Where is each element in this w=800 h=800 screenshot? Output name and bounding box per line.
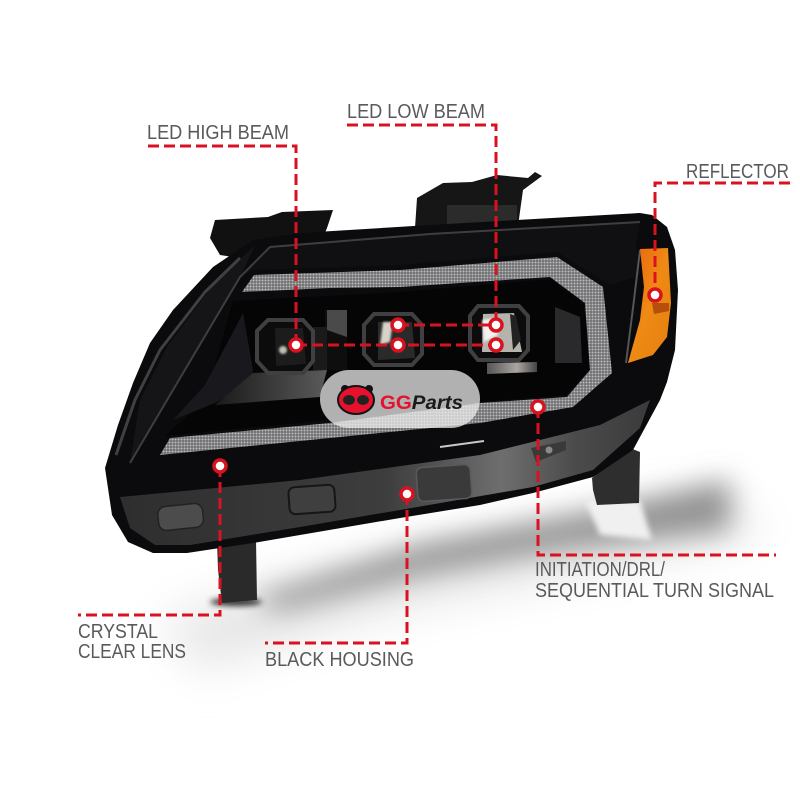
- leader: LED high beam: [148, 146, 296, 344]
- label: initiation / DRL / sequential turn signal: INITIATION/DRL/: [535, 559, 665, 581]
- amber reflector notch: [652, 303, 669, 314]
- chrome highlight: [440, 441, 484, 447]
- ground shadow: [160, 480, 770, 670]
- cavity right panel: [555, 307, 582, 363]
- projector right: [470, 306, 528, 360]
- logo badge: [320, 370, 480, 428]
- amber reflector: [628, 248, 671, 363]
- cavity lower grey panel: [215, 370, 327, 405]
- pillar highlight: [327, 310, 347, 337]
- leader: black housing: [265, 494, 407, 643]
- outer clear lens edge: [130, 222, 640, 463]
- housing silhouette: [105, 213, 678, 553]
- projector middle: [364, 314, 422, 365]
- side translucent lens area: [130, 245, 255, 463]
- lower lens reflector right: [416, 464, 472, 502]
- pin markers: [214, 289, 661, 500]
- top connector left: [210, 210, 333, 258]
- lower lens reflector middle: [288, 484, 336, 515]
- upper glossy area: [240, 222, 640, 285]
- leader: DRL: [538, 407, 776, 555]
- lower grey housing strip: [120, 400, 650, 545]
- label: LED low beam: LED LOW BEAM: [347, 101, 485, 123]
- leader: crystal clear lens: [78, 466, 220, 615]
- leader lines: [78, 125, 790, 643]
- cavity glare: [487, 362, 537, 374]
- badge pill: [320, 370, 480, 428]
- silver trim by reflector: [626, 250, 640, 363]
- label: initiation / DRL / sequential turn signal: SEQUENTIAL TURN SIGNAL: [535, 580, 774, 602]
- label: crystal clear lens: CLEAR LENS: [78, 641, 186, 663]
- lower lens reflector left: [157, 503, 204, 531]
- leader: reflector: [655, 183, 790, 295]
- cavity side wedge: [173, 313, 253, 420]
- side lens highlight: [116, 258, 240, 455]
- label: crystal clear lens: CRYSTAL: [78, 621, 158, 643]
- centre pillar: [325, 310, 347, 370]
- right foot bracket: [592, 448, 640, 505]
- top connector right: [415, 172, 542, 228]
- leader: high beam horizontal: [296, 344, 496, 346]
- inner projector cavity: [165, 279, 589, 436]
- headlight assembly: [105, 172, 678, 603]
- left foot bracket: [217, 540, 257, 603]
- lamp surround: [313, 327, 327, 370]
- leader: LED low beam: [347, 125, 496, 325]
- label: black housing: BLACK HOUSING: [265, 649, 414, 671]
- label: LED high beam: LED HIGH BEAM: [147, 122, 289, 144]
- logo wordmark: GGParts: [380, 393, 463, 414]
- logo icon: [338, 385, 374, 414]
- leader: low beam horizontal: [398, 324, 495, 326]
- DRL light band: [160, 257, 612, 455]
- adjuster screw: [531, 441, 566, 462]
- projector left: [257, 320, 313, 373]
